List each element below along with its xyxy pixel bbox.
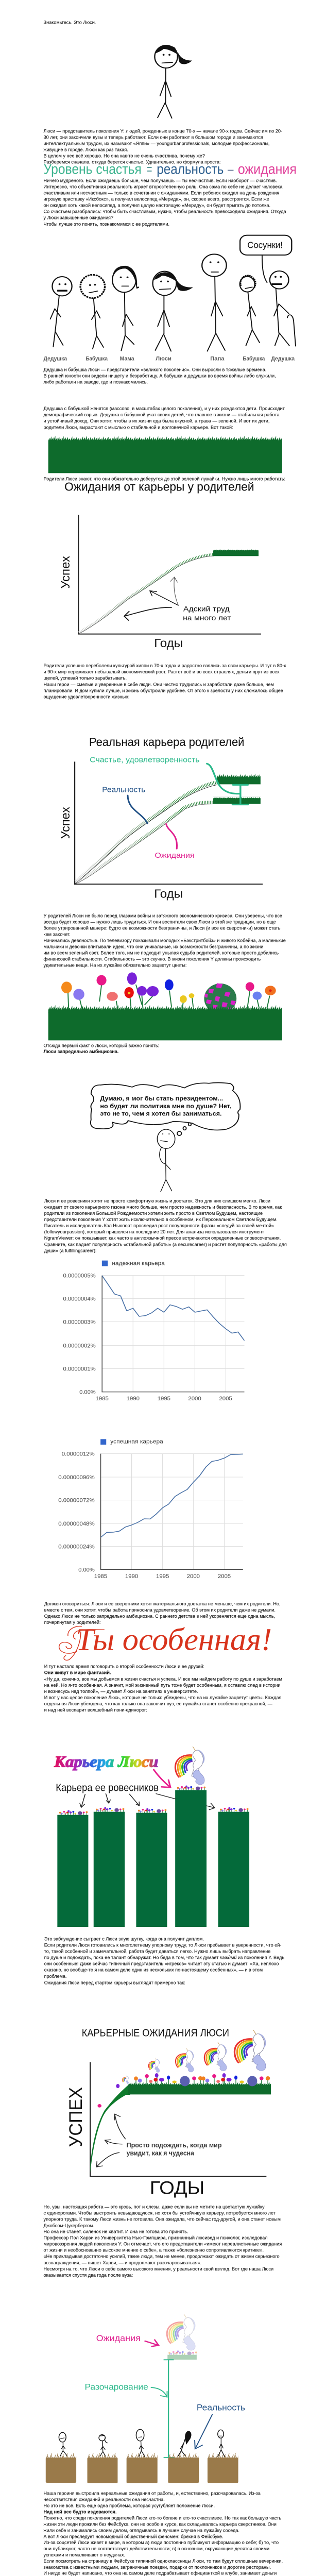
text: generation Y paragraph: интеллектуальным трудом, их называют «Яппи» — youngurbanprofessionals, молодые профессионалы, <box>44 141 269 146</box>
text: fantasy world: на ней. Но я-то особенная. А значит, мой жизненный путь тоже будет особенным, я оставлю след в истории <box>44 1683 281 1688</box>
illustration: brown lawns with stick figures <box>46 2429 238 2483</box>
label: reality <box>102 786 147 823</box>
line chart: fulfilling career: 0.00000048% <box>58 1520 95 1527</box>
heading: parents career expectations: Ожидания от карьеры у родителей <box>64 480 254 494</box>
text: delusion: сказано, но вообще-то я на самом деле один из нескольких по-настоящему особенных», — и в этом <box>44 1968 263 1973</box>
text: parents prosperity: Родители успешно переболели культурой хиппи в 70-х годах и радостно взялись за свои карьеры. И тут в 80-х <box>44 664 286 669</box>
text: Lucy wants more: родители из поколения Большой Рождаемости хотели жить просто в Светлом Будущем, настоящие <box>44 1211 263 1216</box>
text: fantasy world <box>44 1664 282 1713</box>
callout: thought cloud: но будет ли политика мне по душе? Нет, <box>100 1103 232 1110</box>
section: family of Lucy <box>44 254 296 494</box>
text: professor Harvey: Несмотря на то, что Люси о себе самого высокого мнения, у реальности свой взгляд. Вот где наша Люси <box>44 2267 273 2272</box>
text: real work is hard: Но, увы, настоящая работа — это кровь, пот и слезы, даже если вы не метите на цветастую лужайку <box>44 2205 265 2210</box>
text: fantasy world: отдельная Люси убеждена, что как только она закончит вуз, ее лужайка станет особенно прекрасной, — <box>44 1702 272 1707</box>
text: material wealth and satisfaction <box>44 1602 281 1625</box>
label: expectations with arrow <box>96 2333 159 2346</box>
line chart: fulfilling career: 0.00000024% <box>58 1543 95 1550</box>
line chart: secure career: 1985 <box>96 1395 109 1402</box>
line chart: fulfilling career: 0.00% <box>78 1566 95 1573</box>
heading: happiness formula: = <box>147 161 152 177</box>
text: image construction and Facebook: жили себе и занимались своим делом, оглядываясь в лучшем случае на лужайку соседа. <box>44 2528 239 2533</box>
text: image construction and Facebook: несоответствия ожиданий и реальности она несчастна. <box>44 2497 165 2502</box>
icon: flowers on the lawn <box>97 2073 270 2108</box>
line chart: secure career: 1990 <box>127 1395 140 1402</box>
label: hard work for many years: Адский труд <box>183 605 230 613</box>
heading: you are special: Ты особенная! <box>76 1622 272 1657</box>
text: professor Harvey: Но она не станет, силенок не хватит. И она не готова это принять. <box>44 2229 188 2234</box>
text: fantasy world: И тут настало время поговорить о второй особенности Люси и ее друзей: <box>44 1664 204 1669</box>
text: real work is hard: упорного труда. К такому Люси жизнь не готовила. Она ожидала, что сейчас год-другой, и она станет новым <box>44 2217 281 2222</box>
text: Lucy raised as limitless: всегда будет хорошо — нужно лишь трудиться. И они воспитали свою Люси в этой же традиции, но в еще <box>44 920 276 925</box>
illustration: grandfather left <box>50 277 72 347</box>
text: Lucy wants more: ожидает от своего карьерного газона много больше, чем просто надежность и безопасность. В то время, как <box>44 1205 282 1210</box>
heading: Lucy's career rainbow: Карьера Люси <box>54 1753 158 1771</box>
label: expectations with arrow: Ожидания <box>96 2333 141 2343</box>
label: just wait until the world sees: Просто подождать, когда мир <box>127 2142 221 2149</box>
arrows: to peers <box>80 1794 215 1810</box>
line chart: secure career: надежная карьера <box>112 1260 165 1266</box>
illustration: grandfather right with cane <box>270 271 296 346</box>
text: image construction and Facebook: знакомства с известными людьми, заграничные поездки, подарки от поклонников и дорогие рестораны. <box>44 2565 271 2570</box>
text: image construction and Facebook: Но это не всё. Есть еще одна проблема, которая усугубляет положение Люси. <box>44 2503 215 2509</box>
axis label: success: Успех <box>58 555 72 589</box>
text: Lucy's expectations intro: Ожидания Люси перед стартом карьеры выглядят примерно так: <box>44 1980 185 1986</box>
label: reality with arrow: Реальность <box>197 2402 245 2412</box>
illustration: grandmother right <box>240 276 260 346</box>
axis label: years: Годы <box>154 637 183 650</box>
section: Facebook envy <box>44 2491 283 2576</box>
line chart: secure career: 0.0000003% <box>63 1318 96 1325</box>
text: parents prosperity: Наши герои — смелые и уверенные в себе люди. Они честно трудились и заработали даже больше, чем <box>44 682 274 687</box>
arrow: pink to Lucy's career <box>153 1770 170 1787</box>
axis label: years: Годы <box>154 888 183 901</box>
axis label: success: Успех <box>58 806 72 839</box>
line chart: fulfilling career: 0.00000096% <box>58 1474 95 1481</box>
label: hard work for many years <box>183 605 231 622</box>
axis label: years: ГОДЫ <box>150 2178 204 2198</box>
text: material wealth and satisfaction: почерпнутая у родителей: <box>44 1620 101 1625</box>
labels: family member names <box>44 355 295 362</box>
line chart: fulfilling career: 0.0000012% <box>62 1450 95 1457</box>
text: material wealth and satisfaction: Должен оговориться: Люси и ее сверстники хотят материального достатка не меньше, чем их родители. Но, <box>44 1602 281 1607</box>
line chart: secure career: 0.00% <box>79 1388 96 1395</box>
section: parents expectations chart <box>44 515 286 700</box>
label: expectations <box>154 824 195 860</box>
text: fantasy world: Они живут в мире фантазий. <box>44 1670 111 1675</box>
text: ngram comparison intro: души» (a fulfillingcareer): <box>44 1248 96 1253</box>
text: great generation: либо работали на заводе, где и познакомились. <box>44 380 148 385</box>
label: expectations: Ожидания <box>154 852 195 860</box>
text: Lucy raised as limitless: мальчики и девочки впитывали идею, что они уникальные, их возможности безграничны, а по жизни <box>44 944 263 950</box>
text: first fact about Lucy <box>44 1043 159 1055</box>
text: explanation of the formula: игровую приставку «Иксбокс», а получил велосипед «Мерида», он, скорее всего, расстроится. Если же <box>44 197 269 202</box>
text: demographic boom: и устойчивый доход. Они хотят, чтобы в их жизни еда была вкусной, а трава — зеленой. И вот их дети, <box>44 419 269 424</box>
section: flowering lawn and thinking man <box>44 972 282 1241</box>
text: Lucy raised as limitless: финансовой стабильности. Стабильность — это скучно. В жизни поколения Y должны происходить <box>44 957 261 962</box>
icon: unicorns growing <box>122 2030 266 2084</box>
text: professor Harvey: вознаграждения, — пишет Харви, — и продолжают разочаровываться». <box>44 2261 201 2266</box>
text: explanation of the formula: Интересно, что объективная реальность играет второстепенную роль. Она сама по себе не делает человека <box>44 184 283 190</box>
text: material wealth and satisfaction: Однако Люси не только запредельно амбициозна. С раннего детства в ней укореняется еще одна мысль, <box>44 1614 275 1619</box>
text: delusion: по душе и подождать, пока ее талант обнаружат. Но беда в том, что так думает каждый из поколения Y. Ведь <box>44 1955 284 1960</box>
section: disappointment chart <box>44 2229 282 2483</box>
text: fantasy world: и вознесусь над толпой», — думает Люси на занятиях в университете. <box>44 1689 198 1694</box>
line chart: secure career: 0.0000001% <box>63 1365 96 1372</box>
text: Lucy raised as limitless <box>44 913 286 968</box>
text: real work is hard <box>44 2205 281 2229</box>
text: delusion: Если родители Люси готовились к многолетнему упорному труду, то Люси пребывает в уверенности, что ей- <box>44 1943 281 1948</box>
text: delusion <box>44 1937 284 1979</box>
text: Lucy raised as limitless: удивительные вещи. На их лужайке обязательно зацветут цветы: <box>44 963 186 968</box>
text: fantasy world: и над ней воспарит волшебный пони-единорог: <box>44 1708 147 1713</box>
indicator: disappointment gap <box>85 2360 175 2458</box>
label: reality with arrow <box>195 2402 245 2449</box>
line chart: secure career: 2000 <box>188 1395 201 1402</box>
text: ngram comparison intro <box>44 1242 287 1253</box>
text: parents prosperity: планировали. И дом купили лучше, и жизнь обустроили удобнее. От этого к зрелости у них сложилось общее <box>44 688 283 693</box>
text: fantasy world: И вот у нас целое поколение Люсь, которые не только убеждены, что на их лужайке зацветут цветы. Каждая <box>44 1696 281 1701</box>
text: Lucy wants more: NgramViewer: он показывает, как часто в англоязычной прессе встречаются определенные словосочетания. <box>44 1236 281 1241</box>
bar chart: career bars <box>57 1786 249 1927</box>
heading: happiness formula: реальность <box>157 161 224 177</box>
illustration: green lawn <box>48 435 282 473</box>
text: Lucy wants more: Люси и ее ровесники хотят не просто комфортную жизнь и достаток. Это для них слишком мелко. Люси <box>44 1199 270 1204</box>
line chart: fulfilling career <box>58 1438 243 1580</box>
line chart: fulfilling career: 0.00000072% <box>58 1497 95 1503</box>
text: explanation of the formula: он ожидал хоть какой велосипед, а получил целую настоящую «Мериду», он будет прыгать до потолка. <box>44 203 270 208</box>
label: just wait until the world sees: увидит, как я чудесна <box>127 2149 194 2157</box>
text: image construction and Facebook: Если посмотреть на страницу в Фейсбуке типичной одноклассницы Люси, то там будут сплошные вечеринки, <box>44 2559 283 2564</box>
section: Lucy's career expectations chart <box>44 1980 281 2229</box>
text: generation Y paragraph: Люси — представитель поколения Y: людей, рожденных в конце 70-х — начале 90-х годов. Сейчас им по 20- <box>44 129 282 134</box>
text: generation Y paragraph: Разберемся сначала, откуда берется счастье. Удивительно, но формула проста: <box>44 160 221 165</box>
text: generation Y paragraph: В целом у нее всё хорошо. Но она как-то не очень счастлива, почему же? <box>44 154 205 159</box>
callout: speech bubble <box>240 235 291 282</box>
line chart: fulfilling career: 1990 <box>125 1573 138 1580</box>
text: explanation of the formula: Чтобы лучше это понять, познакомимся с ее родителями. <box>44 222 169 227</box>
text: parents prosperity: щелей, успевай только зарабатывать. <box>44 676 127 681</box>
text: Lucy raised as limitless: более утрированной манере: будто ее возможности безграничны, и Люси (и все ее сверстники) может стать <box>44 926 281 931</box>
text: image construction and Facebook: жизни эти люди прожили без Фейсбука, они не особо в курсе, как складывалась карьера сверстников. Они <box>44 2522 277 2527</box>
section: parents real career chart <box>44 736 286 968</box>
callout: thought cloud: Думаю, я мог бы стать президентом... <box>100 1095 223 1102</box>
text: delusion: они особенные! Даже сейчас типичный представитель «игреков» читает эту статью и думает: «Ха, неплохо <box>44 1961 279 1967</box>
text: parents prosperity: ощущение удовлетворенности жизнью: <box>44 694 129 700</box>
arrows: hard work <box>124 577 178 620</box>
text: parents prosperity: и 90-х мир переживает небывалый экономический рост. Растет всё и во всех отраслях, деньги прут из всех <box>44 670 280 675</box>
labels: family member names: Люси <box>156 355 171 362</box>
heading: happiness formula: – <box>228 161 234 177</box>
line chart: secure career <box>63 1260 244 1402</box>
text: image construction and Facebook: они публикуют, часто не соответствует действительности; в) в основном, окружающие делятся своими <box>44 2547 269 2552</box>
line chart: fulfilling career: 2005 <box>218 1573 231 1580</box>
text: first fact about Lucy: Люси запредельно амбициозна. <box>44 1049 119 1055</box>
text: professor Harvey: «Не прикладывая достаточно усилий, такие люди, тем не менее, продолжают ожидать от жизни серьезного <box>44 2254 280 2259</box>
text: great generation: В ранней юности они видели нищету и безработицу. А бабушки и дедушки во время войны либо служили, <box>44 374 276 379</box>
text: explanation of the formula <box>44 178 286 227</box>
text: demographic boom: демографический взрыв. Дедушка с бабушкой учат своих детей, что главное в жизни — стабильная работа <box>44 413 280 418</box>
callout: speech bubble: Сосунки! <box>247 240 283 250</box>
labels: family member names: Дедушка <box>271 355 295 362</box>
callout: thought cloud <box>91 1082 240 1136</box>
text: image construction and Facebook: Над ней все будто издеваются. <box>44 2510 117 2515</box>
indicator: disappointment gap: Разочарование <box>85 2382 148 2392</box>
text: meet Lucy: Знакомьтесь. Это Люси. <box>44 20 96 25</box>
text: delusion: то, такой особенной и замечательной, работа будет даваться легко. Нужно лишь выбрать направление <box>44 1949 270 1954</box>
text: generation Y paragraph <box>44 129 282 165</box>
text: material wealth and satisfaction: вместе с тем, они хотят, чтобы работа приносила удовлетворение. Об этом их родители даже не думали. <box>44 1608 276 1613</box>
text: Lucy raised as limitless: У родителей Люси не было перед глазами войны и затяжного экономического кризиса. Они уверены, что все <box>44 913 282 919</box>
text: real work is hard: с единорогами. Чтобы выстроить невыдающуюся, но хотя бы устойчивую карьеру, потребуется много лет <box>44 2211 276 2216</box>
line chart: secure career: 0.0000002% <box>63 1342 96 1349</box>
labels: family member names: Бабушка <box>85 355 108 362</box>
arrows: just wait <box>96 2114 125 2167</box>
heading: happiness formula: Уровень счастья <box>44 161 142 177</box>
text: Lucy raised as limitless: кем захочет. <box>44 932 71 937</box>
line chart: fulfilling career: 2000 <box>187 1573 200 1580</box>
text: image construction and Facebook: Из-за соцсетей Люси живет в мире, в котором а) люди постоянно публикуют информацию о себе; б) то, что <box>44 2540 279 2546</box>
chart: expected career curve <box>78 515 261 634</box>
section: introduction of Lucy and happiness formula <box>44 20 297 282</box>
label: hard work for many years: на много лет <box>183 614 231 622</box>
text: lawn caption: Родители Люси знают, что они обязательно доберутся до этой зеленой лужайки. Нужно лишь много работать: <box>44 477 285 482</box>
text: Lucy wants more: (followyourpassion), который пришелся на последние 20 лет. Для анализа использовался инструмент <box>44 1230 264 1235</box>
line chart: fulfilling career: 1985 <box>94 1573 107 1580</box>
line chart: secure career: 0.0000005% <box>63 1272 96 1279</box>
text: explanation of the formula: у Люси завышенные ожидания? <box>44 215 114 221</box>
text: Lucy wants more <box>44 1199 282 1241</box>
illustration: thinking stick man <box>157 1129 175 1192</box>
text: image construction and Facebook: А вот Люси преследует новомодный общественный феномен: брехня в Фейсбуке. <box>44 2534 224 2539</box>
heading: Lucy's career expectations: КАРЬЕРНЫЕ ОЖИДАНИЯ ЛЮСИ <box>82 2027 229 2039</box>
callout: thought cloud: это не то, чем я хотел бы заниматься. <box>100 1110 221 1117</box>
text: great generation: Дедушка и бабушка Люси — представители «великого поколения». Они выросли в тяжелые времена. <box>44 367 266 372</box>
illustration: faded unicorn on lawn <box>167 2314 197 2360</box>
text: demographic boom: родители Люси, вырастают с мыслью о стабильной и долговечной карьере. Вот такой: <box>44 425 233 430</box>
text: great generation <box>44 367 276 385</box>
label: happiness satisfaction: Счастье, удовлетворенность <box>90 756 200 764</box>
text: demographic boom: Дедушка с бабушкой женятся (массово, в масштабах целого поколения), и у них рождаются дети. Происходит <box>44 406 285 412</box>
chart: reality versus expectations <box>75 761 263 884</box>
label: peers career: Карьера ее ровесников <box>56 1782 159 1793</box>
label: reality: Реальность <box>102 786 145 794</box>
line chart: secure career: 2005 <box>219 1395 232 1402</box>
text: image construction and Facebook: Наша героиня выстроила нереальные ожидания от работы, и, естественно, разочаровалась. Из-за <box>44 2491 261 2496</box>
text: Lucy wants more: представители поколения Y хотят жить исключительно в особенном, их Персональном Светлом Будущем. <box>44 1217 278 1223</box>
line chart: fulfilling career: 1995 <box>156 1573 169 1580</box>
labels: family member names: Мама <box>120 355 134 362</box>
section: fulfilling career chart and special message <box>44 1438 282 1713</box>
line chart: secure career: 0.0000004% <box>63 1295 96 1302</box>
icon: unicorn with rainbow <box>175 1747 204 1785</box>
text: image construction and Facebook: Понятно, что среди поколения родителей Люси кто-то богаче и кто-то счастливее. Но так как большую часть <box>44 2516 281 2521</box>
labels: family member names: Бабушка <box>243 355 265 362</box>
text: professor Harvey: оказывается спустя два года после вуза: <box>44 2273 133 2278</box>
illustration: Lucy stick figure <box>154 45 192 118</box>
text: demographic boom <box>44 406 285 430</box>
illustration: lawn with flowers <box>48 972 282 1040</box>
text: image construction and Facebook: успехами и помалкивают о неудачах. <box>44 2553 125 2558</box>
text: real work is hard: Джобсом-Цукербергом. <box>44 2224 94 2229</box>
text: image construction and Facebook <box>44 2491 283 2576</box>
text: generation Y paragraph: 30 лет, они закончили вузы и теперь работают. Если они работают в большом городе и занимаются <box>44 135 263 140</box>
labels: family member names: Папа <box>210 355 225 362</box>
text: explanation of the formula: счастливым или несчастным — только в сочетании с ожиданиями. Если ребенок ожидал на день рождения <box>44 191 279 196</box>
text: Lucy wants more: Писатель и исследователь Кэл Ньюпорт проследил рост популярности фразы «следуй за своей мечтой» <box>44 1224 274 1229</box>
illustration: Lucy in the family <box>153 272 193 351</box>
label: happiness satisfaction <box>90 756 248 805</box>
text: professor Harvey <box>44 2229 282 2278</box>
text: Lucy raised as limitless: им во всем зеленый свет. Более того, им не подходит унылая судьба родителей, которые просто добились <box>44 951 279 956</box>
axis label: success: УСПЕХ <box>65 2087 85 2147</box>
text: professor Harvey: Профессор Пол Харви из Университета Нью-Гэмпшира, признанный люсивед и психолог, исследовал <box>44 2235 268 2241</box>
chart: expectations curve <box>90 2062 271 2176</box>
heading: real career of parents: Реальная карьера родителей <box>89 736 244 749</box>
line chart: fulfilling career: успешная карьера <box>110 1438 163 1445</box>
line chart: secure career: 1995 <box>158 1395 170 1402</box>
text: first fact about Lucy: Отсюда первый факт о Люси, который важно понять: <box>44 1043 159 1048</box>
text: delusion: Это заблуждение сыграет с Люси злую шутку, когда она получит диплом. <box>44 1937 204 1942</box>
labels: family member names: Дедушка <box>44 355 67 362</box>
illustration: father <box>202 254 227 351</box>
text: parents prosperity <box>44 664 286 700</box>
section: Lucy's career versus peers <box>44 1747 284 1979</box>
illustration: mother <box>112 266 139 351</box>
illustration: grandmother left <box>80 275 105 349</box>
section: ngram charts <box>44 1242 287 1402</box>
heading: happiness formula <box>44 161 297 177</box>
text: generation Y paragraph: живущие в городе. Люси как раз такая. <box>44 147 128 152</box>
text: delusion: проблема. <box>44 1974 66 1979</box>
text: explanation of the formula: Ничего мудреного. Если ожидаешь больше, чем получаешь — ты несчастлив. Если наоборот — счастлив. <box>44 178 277 183</box>
text: fantasy world: «Ну да, конечно, все мы добьемся в жизни счастья и успеха. И все мы найдем работу по душе и заработаем <box>44 1677 282 1682</box>
text: professor Harvey: от жизни и необоснованно высокое мнение о себе», а также «болезненно сопротивляются критике». <box>44 2248 264 2253</box>
text: professor Harvey: мировоззрения людей поколения Y. Он отмечает, что его представители «имеют нереалистичные ожидания <box>44 2242 282 2247</box>
label: just wait until the world sees <box>127 2142 221 2157</box>
